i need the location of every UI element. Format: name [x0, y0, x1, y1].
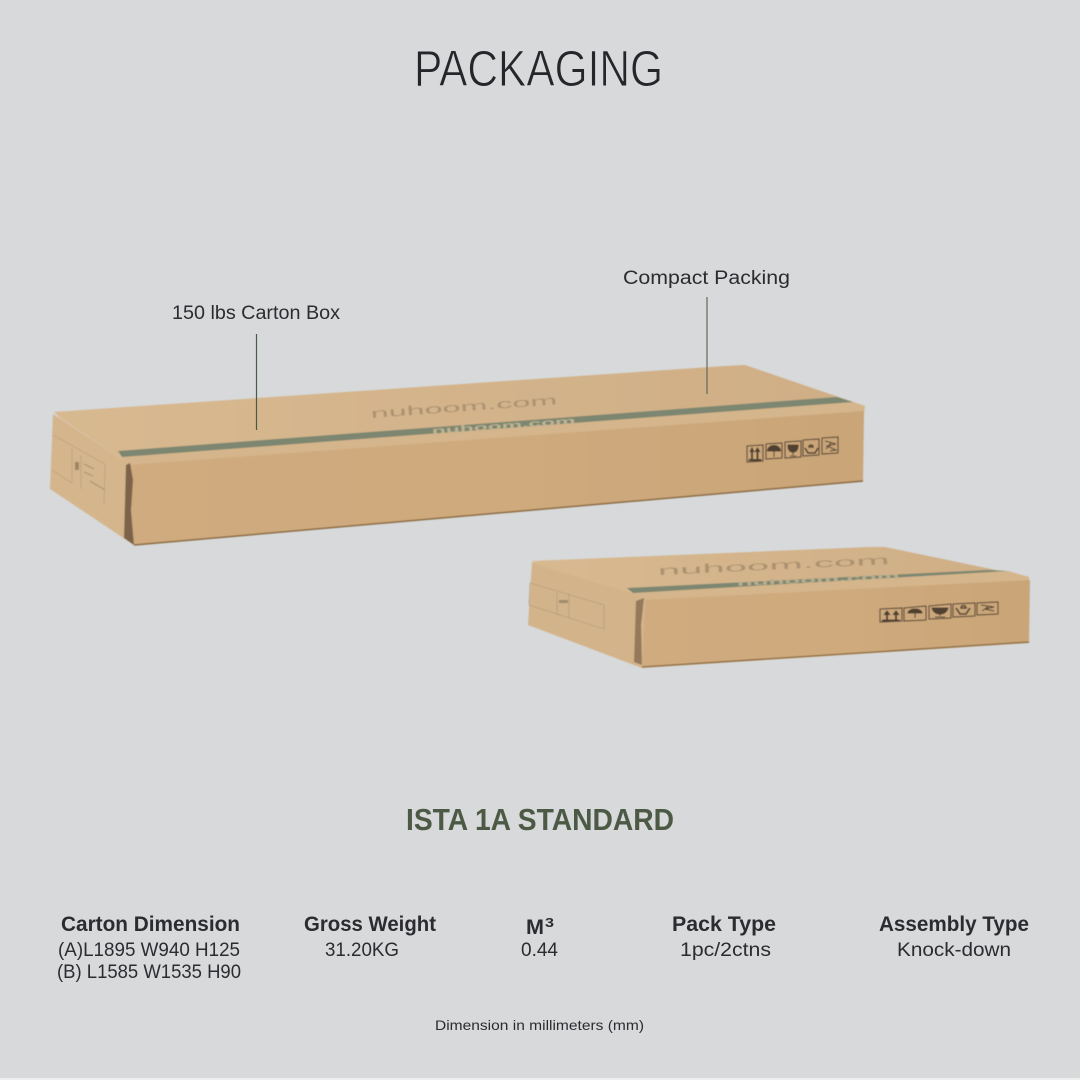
column: gross weight: [304, 913, 436, 961]
leader line: [706, 297, 708, 394]
box A end face: [50, 414, 134, 545]
column: assembly type: [879, 913, 1029, 961]
box B front fold: [633, 571, 1029, 601]
box A strip logo: nuhoom.com: [431, 415, 576, 436]
standard heading: ISTA 1A STANDARD: [406, 802, 674, 837]
column: assembly type: Knock-down: [897, 940, 1011, 961]
column: cubic metres: [521, 915, 558, 961]
callout text: 150 lbs Carton Box: [172, 303, 341, 324]
column: carton dimension: Carton Dimension: [61, 913, 240, 936]
box B handling icons: [880, 602, 998, 622]
box B top face: [532, 547, 1029, 597]
carton box A: [50, 365, 865, 545]
box B corner seam: [634, 598, 644, 665]
box A handling icons: [747, 437, 838, 462]
box B bottom edge: [642, 642, 1029, 667]
leader line: [256, 334, 258, 430]
box A end label: [52, 435, 105, 505]
column: carton dimension: [57, 913, 241, 983]
box B top logo: nuhoom.com: [657, 552, 890, 578]
callout text: Compact Packing: [623, 268, 790, 289]
column: gross weight: Gross Weight: [304, 913, 436, 936]
box A front face: [128, 411, 864, 545]
title: PACKAGING: [414, 40, 663, 97]
box A top logo: nuhoom.com: [370, 392, 558, 421]
box A top face: [54, 365, 865, 463]
spec table: [57, 913, 1029, 983]
box A front fold: [122, 402, 865, 467]
column: carton dimension: (A)L1895 W940 H125: [58, 940, 240, 961]
box B end face: [528, 562, 645, 668]
box B strip logo: nuhoom.com: [737, 571, 900, 588]
column: pack type: Pack Type: [672, 913, 776, 936]
column: gross weight: 31.20KG: [325, 940, 399, 961]
column: carton dimension: (B) L1585 W1535 H90: [57, 962, 241, 983]
column: assembly type: Assembly Type: [879, 913, 1029, 936]
column: pack type: [672, 913, 776, 961]
box B front face: [642, 580, 1030, 668]
carton box B: [528, 547, 1030, 668]
box A corner seam: [124, 463, 134, 545]
box B end label: [529, 583, 604, 629]
column: pack type: 1pc/2ctns: [680, 940, 771, 961]
footnote: Dimension in millimeters (mm): [435, 1017, 644, 1033]
box A bottom edge: [134, 481, 863, 545]
column: cubic metres: M: [526, 916, 544, 939]
column: cubic metres: 0.44: [521, 940, 558, 961]
box A green strip: [118, 397, 853, 457]
column: cubic metres: 3: [545, 915, 554, 930]
box B green strip: [627, 570, 1008, 593]
